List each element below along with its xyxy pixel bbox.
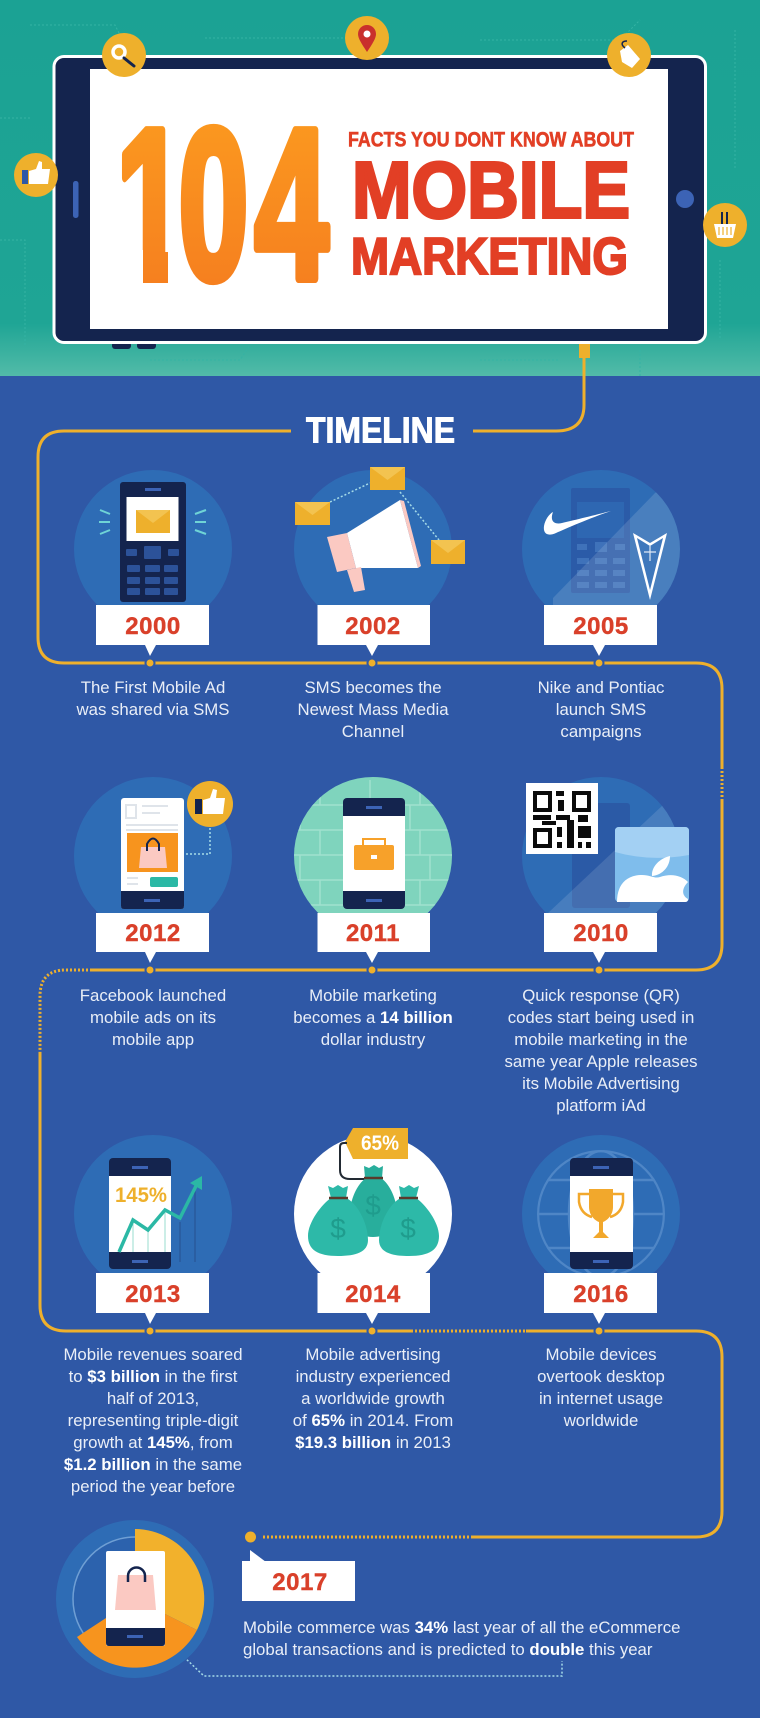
timeline dot — [368, 1326, 376, 1336]
description: $19.3 billion — [295, 1433, 391, 1452]
description: Mobile devices — [546, 1345, 656, 1364]
panel: 2016 — [522, 1135, 680, 1430]
panel: 2012 — [74, 777, 233, 1049]
panel: 2002 — [294, 467, 465, 741]
icon: basket — [703, 203, 747, 247]
description: in the same — [151, 1455, 242, 1474]
description: double this year — [529, 1640, 652, 1659]
year label: 2002 — [345, 613, 401, 640]
icon circle — [294, 1135, 452, 1293]
description: representing triple-digit — [68, 1411, 239, 1430]
year label — [96, 913, 209, 963]
description: Nike and Pontiac — [538, 678, 664, 697]
year label: 2017 — [272, 1569, 328, 1596]
icon circle — [294, 470, 452, 628]
faded phone — [572, 803, 630, 908]
description: codes start being used in — [508, 1008, 694, 1027]
phone with bag — [106, 1551, 165, 1646]
year label: 2000 — [125, 613, 181, 640]
icon: search — [102, 33, 146, 77]
description: a worldwide growth — [301, 1389, 445, 1408]
icon circle — [74, 470, 232, 628]
description: mobile ads on its — [90, 1008, 216, 1027]
description: The First Mobile Ad — [81, 678, 225, 697]
description: half of 2013, — [107, 1389, 199, 1408]
icon: money bags: $ — [330, 1213, 346, 1244]
description: was shared via SMS — [76, 700, 229, 719]
icon: price tag — [607, 33, 651, 77]
year label: 2010 — [573, 920, 629, 947]
icon circle — [74, 777, 232, 935]
timeline dot — [368, 966, 376, 974]
year label — [318, 1273, 430, 1324]
icon: pontiac arrow — [633, 533, 667, 600]
description: SMS becomes the — [304, 678, 442, 697]
timeline dot — [594, 658, 604, 668]
panel: 2013 — [63, 1135, 243, 1496]
icon: money bags: $ — [400, 1213, 416, 1244]
dotted link — [184, 1657, 562, 1676]
description: same year Apple releases — [504, 1052, 698, 1071]
tablet feet — [112, 342, 156, 349]
description: in 2013 — [391, 1433, 451, 1452]
description: its Mobile Advertising — [522, 1074, 680, 1093]
year label — [96, 1273, 209, 1324]
tablet screen — [90, 69, 668, 329]
icon: megaphone — [327, 500, 421, 592]
description: to — [69, 1367, 87, 1386]
heading: timeline: TIMELINE — [306, 410, 455, 450]
panel: 2014 — [293, 1128, 453, 1452]
description: global transactions and is predicted to — [243, 1640, 529, 1659]
description: Quick response (QR) — [522, 986, 680, 1005]
connector plug — [579, 344, 590, 358]
icon circle — [522, 1135, 680, 1293]
icon: apple tile — [615, 827, 689, 902]
title number: 1 — [116, 84, 186, 324]
light wedge — [553, 492, 680, 605]
tablet side bar — [73, 181, 78, 218]
description: mobile app — [112, 1030, 194, 1049]
icon: globe — [537, 1150, 665, 1273]
icon: tag 65% — [345, 1128, 408, 1159]
description: Newest Mass Media — [297, 700, 449, 719]
light wedge — [548, 806, 674, 913]
description: period the year before — [71, 1477, 235, 1496]
description: 65% in 2014. From — [311, 1411, 453, 1430]
icon: envelopes — [295, 467, 465, 564]
year label — [544, 605, 657, 656]
year label: 2016 — [573, 1281, 629, 1308]
title number: 4 — [254, 84, 328, 324]
description: growth at — [73, 1433, 147, 1452]
description: in internet usage — [539, 1389, 663, 1408]
description: overtook desktop — [537, 1367, 665, 1386]
title: facts line: FACTS YOU DONT KNOW ABOUT — [348, 129, 634, 152]
description: $1.2 billion — [64, 1455, 151, 1474]
cord — [340, 1143, 366, 1179]
teal header band — [0, 0, 760, 376]
tablet home button — [676, 190, 694, 208]
panel: 2017 — [56, 1520, 680, 1678]
dotted links — [330, 483, 439, 540]
icon: money bags — [308, 1165, 439, 1256]
panel: 2000 — [74, 470, 232, 719]
year label — [544, 1273, 657, 1324]
icon: location pin — [345, 16, 389, 60]
icon: money bags: $ — [365, 1190, 381, 1221]
icon circle — [74, 1135, 232, 1293]
connector line: timeline path — [38, 358, 722, 1537]
icon circle with banknote pattern — [294, 777, 452, 913]
icon: thumbs up — [14, 153, 58, 197]
timeline dot — [594, 1326, 604, 1336]
description: Mobile advertising — [305, 1345, 441, 1364]
description: Mobile commerce was — [243, 1618, 415, 1637]
year label: 2013 — [125, 1281, 181, 1308]
year label: 2005 — [573, 613, 629, 640]
timeline dot — [368, 658, 376, 668]
tablet — [54, 56, 706, 342]
year label — [96, 605, 209, 656]
icon: phone with trophy — [570, 1158, 633, 1269]
dotted link — [184, 828, 210, 854]
description: Mobile marketing — [309, 986, 437, 1005]
description: campaigns — [560, 722, 642, 741]
year label: 2012 — [125, 920, 181, 947]
timeline dot — [594, 966, 604, 974]
description: Mobile revenues soared — [63, 1345, 243, 1364]
icon: phone with growth chart — [109, 1158, 202, 1269]
icon: phone with ad — [121, 798, 184, 909]
faded phone — [571, 488, 630, 593]
description: of — [293, 1411, 311, 1430]
icon: tag 65%: 65% — [361, 1132, 399, 1155]
panel: 2005 — [522, 470, 680, 740]
description: dollar industry — [321, 1030, 426, 1049]
icon: nike swoosh — [544, 511, 611, 535]
title: mobile: MOBILE — [352, 146, 630, 234]
year label: 2011 — [346, 920, 400, 947]
icon circle — [522, 470, 680, 628]
description: industry experienced — [296, 1367, 450, 1386]
description: launch SMS — [556, 700, 646, 719]
pie chart icon — [56, 1520, 214, 1678]
description: 14 billion — [380, 1008, 453, 1027]
timeline dot — [146, 1326, 154, 1336]
description: becomes a — [293, 1008, 380, 1027]
timeline end dot — [245, 1532, 256, 1542]
icon: feature phone with envelope — [99, 482, 206, 602]
icon: phone with briefcase — [343, 798, 405, 909]
description: 34% last year of all the eCommerce — [415, 1618, 680, 1637]
icon circle — [522, 777, 680, 935]
title: marketing: MARKETING — [351, 228, 628, 286]
icon: thumbs up — [187, 781, 233, 827]
year label: 2014 — [345, 1281, 401, 1308]
description: Facebook launched — [80, 986, 226, 1005]
icon: phone with growth chart: 145% — [115, 1184, 167, 1207]
description: Channel — [342, 722, 404, 741]
panel: 2011 — [290, 777, 460, 1049]
description: mobile marketing in the — [514, 1030, 688, 1049]
panel: 2010 — [504, 777, 700, 1115]
description: worldwide — [563, 1411, 638, 1430]
year label — [318, 913, 430, 963]
title number: 0 — [178, 84, 248, 324]
description: $3 billion in the first — [87, 1367, 237, 1386]
timeline dot — [146, 658, 154, 668]
year label — [318, 605, 430, 656]
year label — [544, 913, 657, 963]
year label — [242, 1550, 355, 1601]
timeline dot — [146, 966, 154, 974]
title number — [108, 84, 328, 324]
description: 145%, from — [147, 1433, 233, 1452]
icon: QR code — [526, 783, 598, 854]
description: platform iAd — [556, 1096, 646, 1115]
